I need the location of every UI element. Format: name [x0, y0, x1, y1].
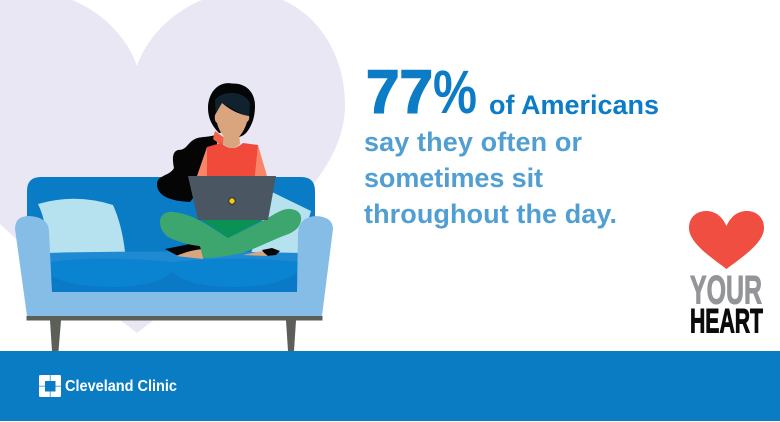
background heart: [0, 0, 345, 333]
sofa legs: [50, 320, 296, 351]
line 2: say they often or: [364, 127, 582, 157]
line 3: sometimes sit: [364, 163, 543, 193]
seat cushions: [49, 258, 299, 292]
right pillow: [250, 192, 311, 256]
sofa rail: [26, 316, 322, 320]
statistic: 77: [366, 58, 433, 126]
icon: Cleveland Clinic logo: [39, 375, 61, 397]
hair highlight: [215, 93, 250, 118]
illustration: woman on sofa: [15, 83, 333, 351]
laptop logo: [229, 198, 235, 204]
Your Heart badge: [689, 211, 764, 340]
shirt: [207, 143, 258, 176]
of Americans: of Americans: [489, 90, 659, 120]
lap: [202, 220, 262, 238]
seat shadow: [50, 272, 298, 292]
icon: red heart: [689, 211, 764, 269]
hair: [208, 83, 255, 137]
headline: [364, 58, 659, 229]
sofa back: [27, 177, 315, 260]
left pillow: [38, 199, 125, 253]
statistic: %: [433, 58, 477, 126]
shoes: [165, 242, 280, 256]
neck: [223, 130, 240, 148]
scarf: [213, 131, 226, 146]
face: [215, 103, 249, 140]
legs: [160, 209, 301, 258]
Cleveland Clinic wordmark: Cleveland Clinic: [65, 378, 177, 395]
shirt sleeves: [197, 145, 267, 176]
sofa frame and arms: [15, 216, 333, 316]
footer band: [0, 351, 780, 421]
laptop: [188, 176, 276, 220]
seat base: [47, 252, 302, 292]
feet: [176, 249, 268, 259]
hair tail: [157, 134, 218, 202]
line 4: throughout the day.: [364, 199, 617, 229]
